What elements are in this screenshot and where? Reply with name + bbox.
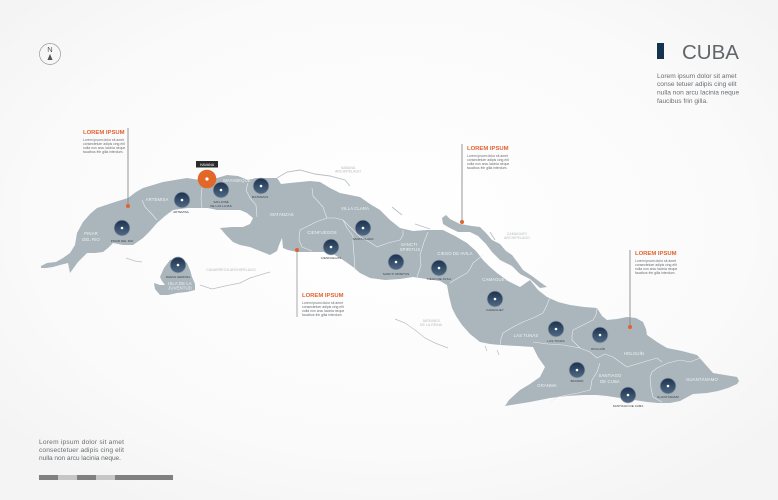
callout: east: faucibus frin gilla interdum. (635, 271, 675, 275)
province names: CIENFUEGOS (307, 230, 337, 235)
callout: north-east cays: consectetuer adipis cing elit (467, 158, 509, 162)
callout: north-east cays: Lorem ipsum dolor sit amet (467, 154, 508, 158)
callout: south-centre: nulla non arcu lacinia neque (302, 309, 344, 313)
province names: ISLA DE LA (168, 281, 192, 286)
south cays (126, 258, 499, 355)
city markers: BAYAMO (571, 379, 584, 383)
province names: CIEGO DE AVILA (437, 251, 473, 256)
province names: MATANZAS (270, 212, 294, 217)
city markers: HOLGUÍN (591, 347, 605, 351)
city markers: GUANTÁNAMO (657, 395, 680, 399)
province names: HOLGUÍN (624, 351, 644, 356)
title (657, 41, 739, 64)
callout: north-west: Lorem ipsum dolor sit amet (83, 138, 124, 142)
province names: MAYABEQUE (223, 178, 251, 183)
callout: north-west: LOREM IPSUM (83, 130, 125, 136)
province names: SANTIAGO (598, 373, 622, 378)
province names: SANCTI (401, 242, 417, 247)
map: Cuba (41, 161, 739, 408)
capital marker: Havana: HAVANA (200, 163, 215, 167)
sea labels: ARCHIPELAGO (504, 236, 530, 240)
sea labels: ARCHIPELAGO (335, 170, 361, 174)
city markers: DE LAS LAJAS (210, 204, 232, 208)
city markers (111, 178, 680, 408)
title: CUBA (682, 41, 739, 64)
callout: east: consectetuer adipis cing elit (635, 263, 677, 267)
province names: SPIRITUS (400, 247, 420, 252)
province names: PINAR (84, 231, 98, 236)
sea labels: CAMAGUEY (507, 232, 528, 236)
city markers: SANCTI SPIRITUS (383, 272, 409, 276)
city markers: LAS TUNAS (547, 339, 565, 343)
city markers: NUEVA GERONA (166, 275, 191, 279)
callout: east: LOREM IPSUM (635, 251, 677, 257)
province names: DE CUBA (600, 379, 620, 384)
province names: LAS TUNAS (514, 333, 538, 338)
description: bottom left: Lorem ipsum dolor sit amet (39, 439, 124, 446)
callout: east: Lorem ipsum dolor sit amet (635, 259, 676, 263)
sea labels: DE LA REINA (420, 323, 443, 327)
callout: north-west: consectetuer adipis cing elit (83, 142, 125, 146)
city markers: MATANZAS (252, 195, 268, 199)
description: bottom left (39, 439, 124, 462)
province names: DEL RIO (82, 237, 100, 242)
callout: south-centre: consectetuer adipis cing elit (302, 305, 344, 309)
description: top right: nulla non arcu lacinia neque (657, 90, 739, 96)
sea labels: SABANA (341, 166, 356, 170)
callout: south-centre: LOREM IPSUM (302, 293, 344, 299)
callout: south-centre: Lorem ipsum dolor sit amet (302, 301, 343, 305)
icon: north compass: N (47, 45, 53, 54)
province names (82, 178, 718, 388)
province names: GUANTÁNAMO (686, 377, 718, 382)
city markers: SANTIAGO DE CUBA (613, 404, 644, 408)
scale bar (39, 475, 173, 480)
callout: north-west (83, 128, 130, 208)
province names: CAMAGUEY (482, 277, 508, 282)
capital marker: Havana (196, 161, 218, 188)
description: top right (657, 73, 739, 105)
callout: east (628, 250, 677, 329)
city markers: PINAR DEL RIO (111, 239, 134, 243)
province names: ARTEMISA (146, 197, 168, 202)
description: bottom left: consectetuer adipis cing elit (39, 447, 124, 454)
callout: north-west: nulla non arcu lacinia neque (83, 146, 125, 150)
city markers: SANTA CLARA (352, 237, 374, 241)
description: top right: conse tetuer adipis cing elit (657, 81, 737, 88)
sea labels: JARDINES (422, 319, 440, 323)
callout: north-east cays: LOREM IPSUM (467, 146, 509, 152)
description: top right: Lorem ipsum dolor sit amet (657, 73, 737, 80)
province names: JUVENTUD (168, 286, 192, 290)
city markers: CIENFUEGOS (321, 256, 341, 260)
callout: east: nulla non arcu lacinia neque (635, 267, 677, 271)
callout: north-east cays: nulla non arcu lacinia neque (467, 162, 509, 166)
city markers: CAMAGUEY (486, 308, 504, 312)
main island (41, 175, 739, 406)
province names: VILLA CLARA (341, 206, 369, 211)
sea labels: CANARREOS ARCHIPELAGO (206, 268, 256, 272)
city markers: ARTEMISA (173, 210, 190, 214)
description: top right: faucibus frin gilla. (657, 98, 708, 105)
city markers: SAN JOSÉ (213, 199, 229, 204)
province names: GRANMA (537, 383, 557, 388)
callout: north-west: faucibus frin gilla interdum. (83, 150, 123, 154)
icon: north compass (40, 44, 60, 64)
north cays (442, 215, 547, 288)
callout: north-east cays: faucibus frin gilla interdum. (467, 166, 507, 170)
callout: south-centre: faucibus frin gilla interdum. (302, 313, 342, 317)
Isla de la Juventud (154, 258, 195, 295)
callout: north-east cays (460, 144, 509, 224)
callout: south-centre (295, 248, 344, 317)
sea labels (206, 166, 530, 327)
province borders (142, 183, 700, 402)
city markers: CIEGO DE ÁVILA (427, 277, 452, 281)
description: bottom left: nulla non arcu lacinia neque. (39, 455, 121, 462)
